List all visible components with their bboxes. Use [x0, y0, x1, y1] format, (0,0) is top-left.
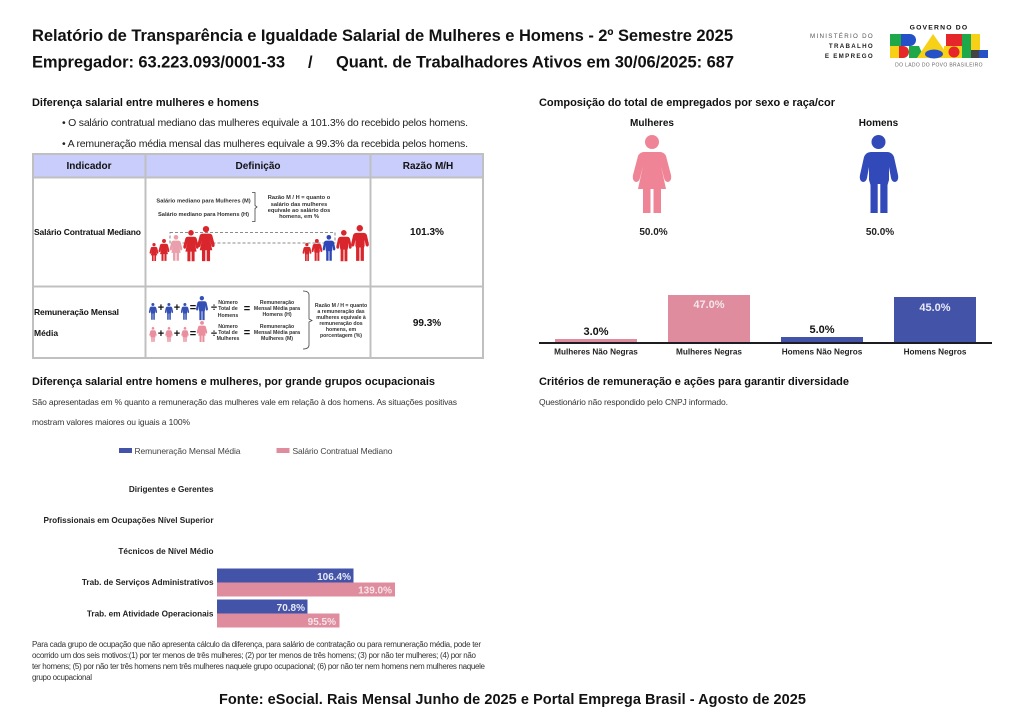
- heading: composição: Composição do total de empregados por sexo e raça/cor: [539, 97, 836, 109]
- text block: explicação: mostram valores maiores ou iguais a 100%: [32, 417, 190, 427]
- diagram: remuneração média: +: [158, 328, 164, 340]
- diagram: salário mediano: salário das mulheres: [271, 202, 327, 208]
- diagram: remuneração média: +: [158, 302, 164, 314]
- title: /: [308, 54, 313, 72]
- heading: diferença salarial: Diferença salarial entre mulheres e homens: [32, 97, 259, 109]
- text block: questionário: Questionário não respondido pelo CNPJ informado.: [539, 397, 728, 407]
- bar chart: raça/cor: 45.0%: [919, 302, 951, 314]
- legend: Salário Contratual Mediano: [292, 446, 393, 456]
- bar chart: raça/cor: 47.0%: [693, 299, 725, 311]
- diagram: remuneração média: Mensal Média para: [254, 330, 300, 336]
- diagram: salário mediano: Razão M / H = quanto o: [268, 195, 331, 201]
- text block: explicação: São apresentadas em % quanto a remuneração das mulheres vale em relação à dos homens. As situações positivas: [32, 397, 457, 407]
- diagram: remuneração média: Número: [218, 324, 238, 330]
- row value: 101.3%: 101.3%: [410, 227, 444, 238]
- diagram: remuneração média: Total de: [218, 306, 238, 312]
- diagram: salário mediano: Salário mediano para Homens (H): [158, 212, 249, 218]
- bar chart: grupos ocupacionais: 139.0%: [358, 586, 392, 596]
- table header: Indicador: [66, 161, 112, 172]
- text block: nota: grupo ocupacional: [32, 673, 92, 682]
- diagram: remuneração média: Total de: [218, 330, 238, 336]
- footer: fonte: Fonte: eSocial. Rais Mensal Junho de 2025 e Portal Emprega Brasil - Agosto de 2025: [219, 692, 806, 708]
- icon: homens: Homens: [859, 118, 899, 129]
- text block: bullets: • O salário contratual mediano das mulheres equivale a 101.3% do recebido pelos homens.: [62, 117, 468, 129]
- diagram: remuneração média: Mulheres (M): [261, 336, 293, 342]
- bar chart: grupos ocupacionais: 106.4%: [317, 572, 351, 583]
- text block: bullets: • A remuneração média mensal das mulheres equivale a 99.3% da recebida pelos homens.: [62, 138, 468, 150]
- diagram: remuneração média: =: [244, 303, 250, 315]
- diagram: remuneração média: ÷: [211, 302, 217, 314]
- bar chart: grupos ocupacionais: Trab. de Serviços Administrativos: [82, 578, 214, 587]
- diagram: remuneração média: +: [174, 328, 180, 340]
- table header: [66, 161, 453, 172]
- diagram: remuneração média: =: [244, 327, 250, 339]
- bar chart: raça/cor: Mulheres Negras: [676, 348, 742, 356]
- legend: [119, 446, 393, 456]
- diagram: remuneração média: Remuneração: [260, 324, 294, 330]
- diagram: remuneração média: porcentagem (%): [320, 333, 362, 339]
- diagram: remuneração média: Mulheres: [217, 336, 239, 342]
- text block: nota: [32, 640, 486, 682]
- table header: Razão M/H: [403, 161, 453, 172]
- table header: Definição: [235, 161, 281, 172]
- logo: Ministério do Trabalho e Emprego: TRABALHO: [829, 43, 874, 50]
- diagram: remuneração média: mulheres equivale à: [316, 315, 366, 321]
- bar chart: grupos ocupacionais: Profissionais em Ocupações Nível Superior: [44, 516, 214, 525]
- diagram: salário mediano: equivale ao salário dos: [268, 208, 330, 214]
- diagram: remuneração média: Homens: [218, 313, 238, 319]
- diagram: remuneração média: Razão M / H = quanto: [315, 303, 367, 309]
- logo: Governo do Brasil: GOVERNO DO: [910, 24, 968, 32]
- diagram: salário mediano: Salário mediano para Mulheres (M): [156, 198, 251, 204]
- row label: remuneração mensal média: Remuneração Mensal: [34, 307, 119, 317]
- diagram: salário mediano: homens, em %: [279, 214, 319, 220]
- text block: nota: ter homens; (5) por não ter três homens nem três mulheres naquele grupo ocupacional; (6) por não ter nem homens nem mulheres naquele: [32, 662, 486, 671]
- diagram: remuneração média: +: [174, 302, 180, 314]
- icon: mulheres: [630, 118, 674, 238]
- heading: critérios: Critérios de remuneração e ações para garantir diversidade: [539, 376, 849, 388]
- bar chart: raça/cor: 5.0%: [809, 324, 835, 336]
- title: Empregador: 63.223.093/0001-33: [32, 54, 285, 72]
- diagram: remuneração média: Remuneração: [260, 300, 294, 306]
- bar chart: grupos ocupacionais: 70.8%: [277, 603, 305, 614]
- bar chart: raça/cor: [539, 295, 992, 356]
- row value: 99.3%: 99.3%: [413, 318, 441, 329]
- table: indicadores: [33, 154, 483, 358]
- diagram: salário mediano: [150, 192, 369, 261]
- bar chart: raça/cor: Homens Negros: [904, 348, 967, 356]
- logo: Governo do Brasil: [890, 24, 988, 68]
- diagram: remuneração média: homens, em: [326, 327, 357, 333]
- bar chart: grupos ocupacionais: Dirigentes e Gerentes: [129, 485, 214, 494]
- logo: Ministério do Trabalho e Emprego: [810, 33, 874, 60]
- heading: diferença por grupos ocupacionais: Diferença salarial entre homens e mulheres, por grande grupos ocupacionais: [32, 376, 435, 388]
- diagram: remuneração média: remuneração dos: [319, 321, 363, 327]
- title: Quant. de Trabalhadores Ativos em 30/06/2025: 687: [336, 54, 734, 72]
- bar chart: grupos ocupacionais: [44, 485, 395, 628]
- bar chart: grupos ocupacionais: Trab. em Atividade Operacionais: [87, 610, 214, 618]
- legend: Remuneração Mensal Média: [134, 446, 241, 456]
- bar chart: raça/cor: Homens Não Negros: [782, 348, 863, 356]
- row label: salário contratual mediano: Salário Contratual Mediano: [34, 227, 141, 237]
- text block: explicação: [32, 397, 457, 427]
- text block: nota: ocorrido um dos seis motivos:(1) por ter menos de três mulheres; (2) por ter menos de três homens; (3) por não ter mulheres; (4) por não: [32, 651, 477, 660]
- icon: mulheres: 50.0%: [639, 227, 668, 238]
- diagram: remuneração média: a remuneração das: [317, 309, 365, 315]
- diagram: remuneração média: Mensal Média para: [254, 306, 300, 312]
- logo: Ministério do Trabalho e Emprego: MINISTÉRIO DO: [810, 33, 874, 40]
- diagram: remuneração média: Homens (H): [262, 312, 292, 318]
- icon: homens: [859, 118, 899, 238]
- row label: remuneração mensal média: Média: [34, 328, 58, 338]
- bar chart: grupos ocupacionais: Técnicos de Nível Médio: [118, 547, 214, 556]
- icon: homens: 50.0%: [866, 227, 894, 238]
- diagram: remuneração média: =: [190, 328, 196, 340]
- bar chart: raça/cor: 3.0%: [583, 326, 609, 338]
- logo: Governo do Brasil: DO LADO DO POVO BRASILEIRO: [895, 62, 983, 68]
- title: Relatório de Transparência e Igualdade Salarial de Mulheres e Homens - 2º Semestre 2025: [32, 27, 733, 45]
- title: [32, 27, 734, 72]
- row label: remuneração mensal média: [34, 307, 119, 338]
- diagram: remuneração média: ÷: [211, 328, 217, 340]
- icon: mulheres: Mulheres: [630, 118, 674, 129]
- logo: Ministério do Trabalho e Emprego: E EMPREGO: [825, 53, 874, 60]
- bar chart: grupos ocupacionais: 95.5%: [308, 617, 336, 628]
- diagram: remuneração média: =: [190, 302, 196, 314]
- text block: bullets: [62, 117, 468, 150]
- text block: nota: Para cada grupo de ocupação que não apresenta cálculo da diferença, para salário de contratação ou para remuneração média, pode ter: [32, 640, 481, 649]
- diagram: remuneração média: Número: [218, 300, 238, 306]
- diagram: remuneração média: [149, 291, 367, 349]
- bar chart: raça/cor: Mulheres Não Negras: [554, 348, 638, 356]
